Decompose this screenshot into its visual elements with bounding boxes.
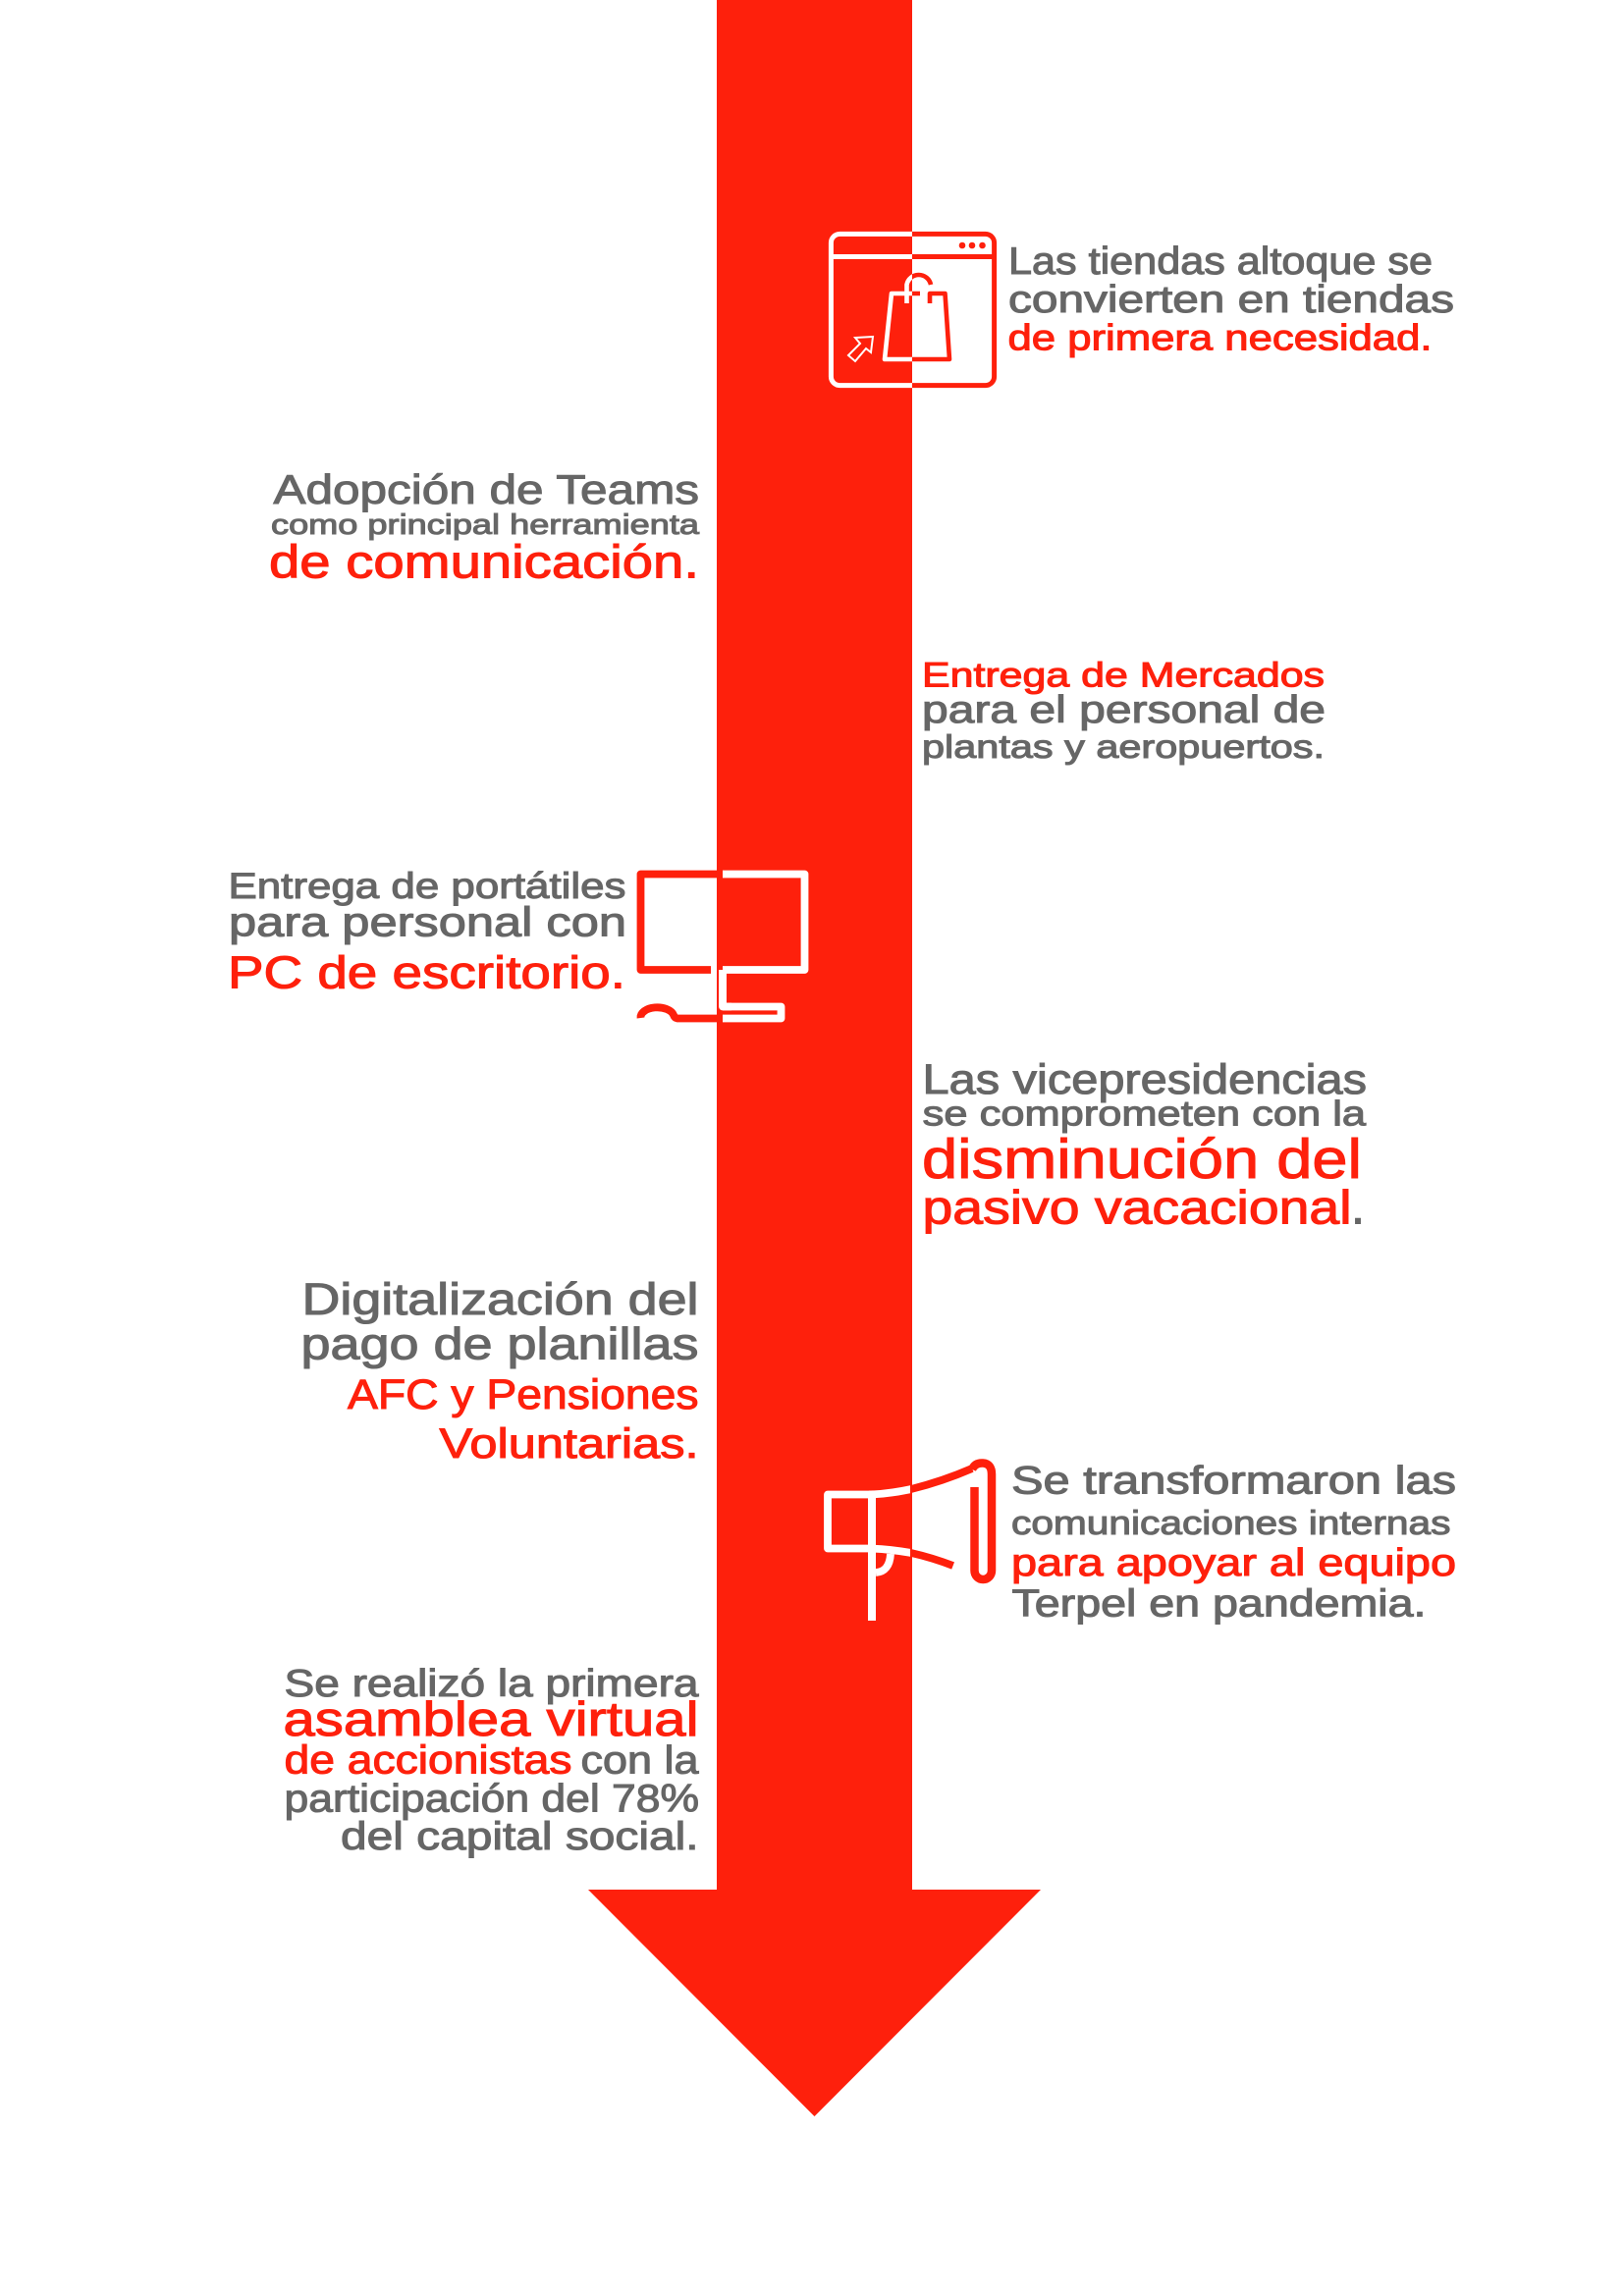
text: entrega de portátiles	[228, 866, 626, 998]
text: asamblea virtual: del capital social.	[341, 1815, 699, 1858]
text: entrega de mercados	[922, 656, 1326, 765]
text: entrega de portátiles: Entrega de portátiles	[228, 866, 626, 906]
text: digitalización de planillas: Digitalización del	[302, 1274, 699, 1324]
icon: desktop computer	[640, 874, 805, 1019]
text: asamblea virtual: de accionistas	[285, 1737, 571, 1783]
text: comunicaciones internas: Terpel en pandemia.	[1011, 1583, 1426, 1626]
text: entrega de mercados: plantas y aeropuertos.	[922, 728, 1325, 765]
text: digitalización de planillas: AFC y Pensiones	[348, 1371, 699, 1418]
text: digitalización de planillas: Voluntarias.	[440, 1420, 699, 1468]
text: vicepresidencias: .	[1351, 1183, 1365, 1235]
text: tiendas altoque	[1007, 240, 1454, 358]
text: asamblea virtual	[283, 1663, 699, 1858]
text: vicepresidencias: Las vicepresidencias	[923, 1056, 1367, 1103]
arrow: vertical timeline	[588, 0, 1041, 2116]
icon: online shop window with bag	[831, 234, 995, 386]
text: comunicaciones internas: para apoyar al equipo	[1011, 1542, 1456, 1584]
text: asamblea virtual: asamblea virtual	[283, 1693, 699, 1746]
text: adopción de Teams: como principal herramienta	[271, 509, 700, 541]
text: adopción de Teams: de comunicación.	[269, 535, 699, 587]
text: entrega de portátiles: para personal con	[229, 898, 626, 944]
text: comunicaciones internas: comunicaciones internas	[1011, 1505, 1450, 1542]
text: tiendas altoque: Las tiendas altoque se	[1008, 240, 1433, 283]
text: vicepresidencias: disminución del	[922, 1128, 1362, 1191]
text: asamblea virtual: Se realizó la primera	[285, 1663, 699, 1705]
text: adopción de Teams: Adopción de Teams	[273, 466, 699, 512]
text: entrega de portátiles: PC de escritorio.	[228, 947, 625, 998]
text: vicepresidencias: pasivo vacacional	[923, 1183, 1351, 1235]
text: asamblea virtual: participación del 78%	[285, 1778, 699, 1821]
icon: megaphone	[828, 1463, 992, 1621]
text: entrega de mercados: para el personal de	[922, 689, 1326, 731]
text: entrega de mercados: Entrega de Mercados	[922, 656, 1325, 694]
text: comunicaciones internas	[1011, 1460, 1456, 1626]
text: tiendas altoque: de primera necesidad.	[1007, 318, 1432, 358]
text: digitalización de planillas	[300, 1274, 699, 1468]
text: adopción de Teams	[269, 466, 700, 587]
text: digitalización de planillas: pago de planillas	[300, 1319, 699, 1368]
text: asamblea virtual: con la	[581, 1739, 699, 1783]
text: tiendas altoque: convierten en tiendas	[1008, 279, 1454, 321]
text: vicepresidencias	[922, 1056, 1367, 1235]
text: comunicaciones internas: Se transformaron las	[1011, 1460, 1456, 1503]
text: vicepresidencias: se comprometen con la	[923, 1094, 1367, 1134]
